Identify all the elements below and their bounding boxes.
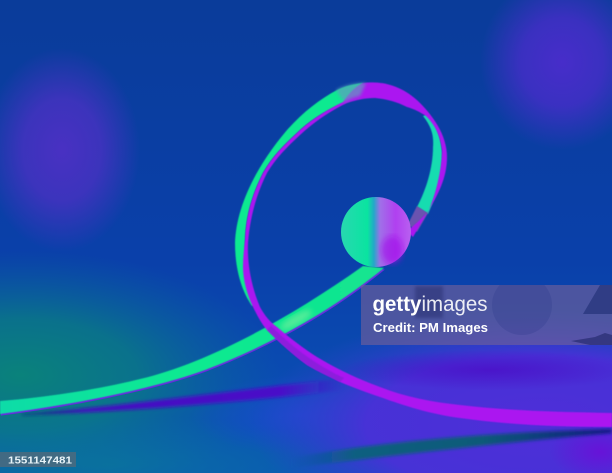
sphere xyxy=(341,197,411,267)
ribbon: highlight on green band xyxy=(278,307,314,333)
ribbon: inner green right strip xyxy=(417,114,442,214)
ribbon: grey shadow near sphere xyxy=(408,206,428,232)
ribbon: green upper arc xyxy=(235,83,363,306)
watermark panel xyxy=(361,285,612,345)
image id badge xyxy=(0,452,76,467)
ribbon: purple edge under green band xyxy=(1,268,385,416)
sphere lower purple shading xyxy=(381,236,403,264)
watermark logo text: gettyimages xyxy=(372,293,488,316)
ribbon: green lower band xyxy=(0,266,384,414)
ribbon: dark shading on purple lower curve xyxy=(267,326,344,382)
ribbon: blend at top from green to purple xyxy=(336,83,366,102)
ribbon: purple main edge xyxy=(243,82,612,427)
watermark credit text: Credit: PM Images xyxy=(373,321,488,335)
ribbon shadows on floor xyxy=(22,378,612,468)
image id badge: 1551147481 xyxy=(8,454,72,466)
watermark ghost shapes xyxy=(414,285,612,345)
